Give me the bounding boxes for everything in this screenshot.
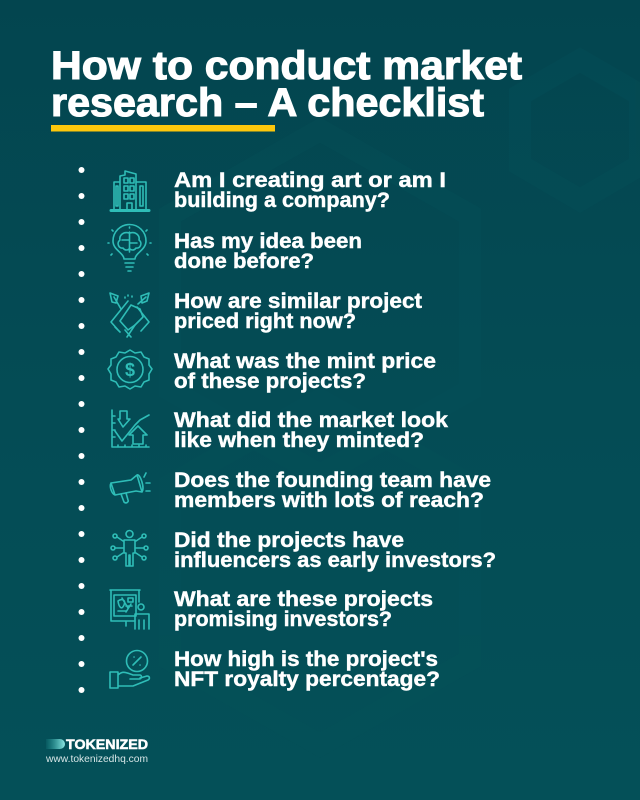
text: item 7: Did the projects have — [174, 528, 404, 552]
text: item 5: like when they minted? — [174, 428, 424, 452]
text: item 2 — [174, 229, 362, 273]
text: item 9 — [174, 647, 440, 691]
text: item 1: Am I creating art or am I — [174, 168, 446, 192]
icon: office buildings — [111, 171, 149, 210]
icon: market chart with arrows — [112, 410, 149, 447]
text: item 3 — [174, 289, 422, 333]
text: item 1 — [174, 168, 446, 212]
text: item 2: Has my idea been — [174, 229, 362, 253]
text: item 2: done before? — [174, 249, 314, 273]
text: item 1: building a company? — [174, 188, 390, 212]
icon: dollar seal: $ — [125, 360, 135, 380]
text: item 6: members with lots of reach? — [174, 488, 484, 512]
text: item 7: influencers as early investors? — [174, 548, 496, 572]
icon: presentation board with audience — [110, 590, 149, 629]
icon: dollar seal — [108, 350, 152, 389]
text: item 4 — [174, 349, 436, 393]
text: item 3: priced right now? — [174, 309, 356, 333]
text: item 4: of these projects? — [174, 369, 366, 393]
text: item 6 — [174, 468, 491, 512]
text: item 5 — [174, 408, 448, 452]
text: item 5: What did the market look — [174, 408, 448, 432]
text: item 8 — [174, 587, 433, 631]
text: item 8: What are these projects — [174, 587, 433, 611]
footer url: www.tokenizedhq.com — [45, 753, 148, 765]
text: item 9: NFT royalty percentage? — [174, 667, 440, 691]
text: item 6: Does the founding team have — [174, 468, 491, 492]
icon: hand with percent coin — [110, 650, 149, 688]
text: item 8: promising investors? — [174, 607, 392, 631]
title: How to conduct market — [51, 44, 522, 88]
text: item 4: What was the mint price — [174, 349, 436, 373]
text: item 7 — [174, 528, 496, 572]
title: research – A checklist — [51, 81, 484, 125]
text: item 9: How high is the project's — [174, 647, 438, 671]
icon: person with network — [111, 530, 148, 566]
footer logo: TOKENIZED — [66, 737, 148, 752]
icon: raised clasped hands with flags — [110, 293, 149, 337]
icon: light bulb with brain — [108, 224, 151, 271]
text: item 3: How are similar project — [174, 289, 422, 313]
icon: megaphone — [110, 473, 150, 503]
dotted timeline — [78, 167, 84, 693]
title underline — [51, 125, 275, 132]
title — [51, 44, 522, 125]
